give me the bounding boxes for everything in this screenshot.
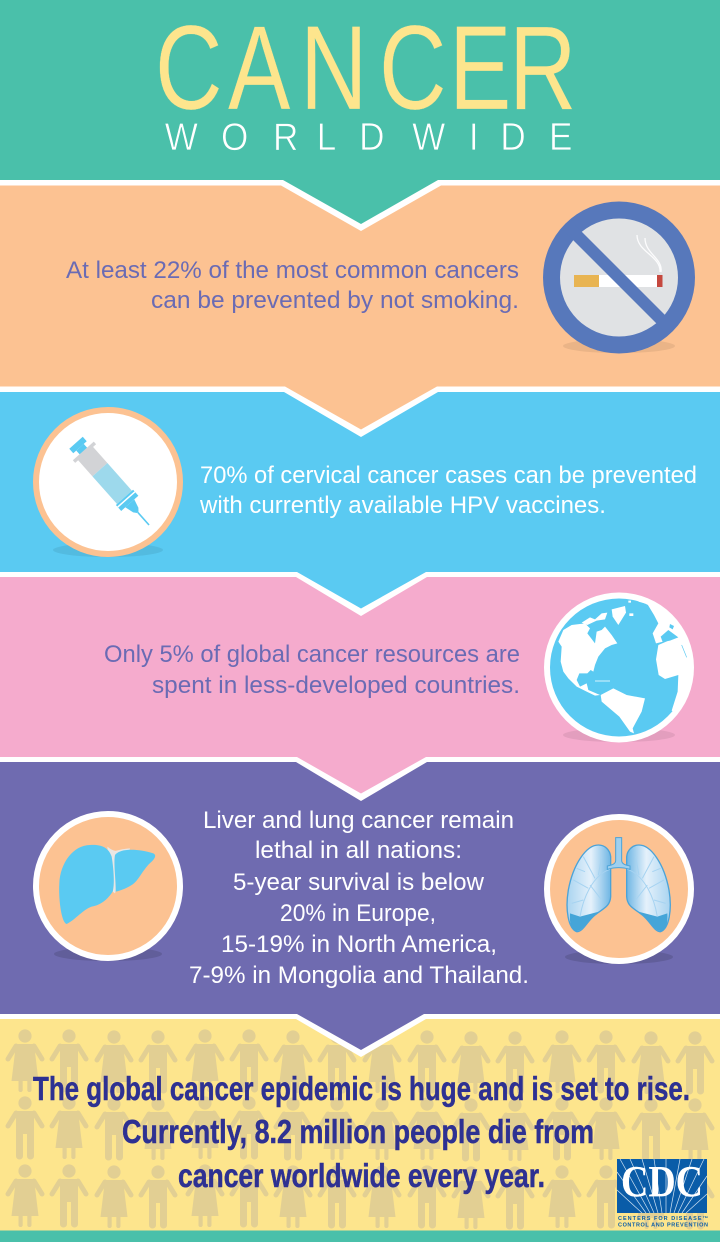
closing statement: Currently, 8.2 million people die from xyxy=(122,1114,594,1151)
panel: blue vaccine section xyxy=(0,386,720,616)
icon: liver xyxy=(36,814,180,961)
text block: survival: lethal in all nations: xyxy=(255,837,462,864)
text block: resources xyxy=(104,641,520,699)
closing statement xyxy=(33,1071,690,1195)
logo: CDC: CDC xyxy=(621,1157,703,1206)
logo: CDC: CENTERS FOR DISEASE™ xyxy=(618,1216,708,1222)
logo: CDC: CONTROL AND PREVENTION xyxy=(618,1222,708,1228)
text block: resources: spent in less-developed countries. xyxy=(152,672,520,699)
subtitle: WORLDWIDE xyxy=(165,114,572,158)
text block: survival: Liver and lung cancer remain xyxy=(203,807,514,834)
text block: smoking: At least 22% of the most common cancers xyxy=(66,257,519,284)
closing statement: cancer worldwide every year. xyxy=(178,1158,545,1195)
panel: teal header xyxy=(0,0,720,224)
text block: vaccines: with currently available HPV vaccines. xyxy=(199,492,606,519)
text block: vaccines xyxy=(199,462,697,519)
text block: survival: 5-year survival is below xyxy=(233,869,485,896)
text block: smoking: can be prevented by not smoking. xyxy=(151,287,519,314)
text block: resources: Only 5% of global cancer resources are xyxy=(104,641,520,668)
panel: people background xyxy=(0,1019,720,1242)
icon: lungs xyxy=(547,817,691,964)
text block: survival: 7-9% in Mongolia and Thailand. xyxy=(189,962,529,989)
text block: vaccines: 70% of cervical cancer cases can be prevented xyxy=(200,462,697,489)
title: CANCER xyxy=(155,1,577,135)
text block: survival xyxy=(189,807,529,989)
panel: purple liver and lung section xyxy=(0,757,720,1057)
text block: survival: 15-19% in North America, xyxy=(221,931,497,958)
icon: syringe xyxy=(36,410,180,557)
text block: survival: 20% in Europe, xyxy=(280,900,436,927)
text block: smoking xyxy=(66,257,519,314)
icon: no smoking xyxy=(543,202,695,354)
logo: CDC xyxy=(617,1157,708,1228)
panel: peach smoking section xyxy=(0,174,720,437)
panel: pink resources section xyxy=(0,572,720,801)
icon: globe xyxy=(544,590,703,742)
